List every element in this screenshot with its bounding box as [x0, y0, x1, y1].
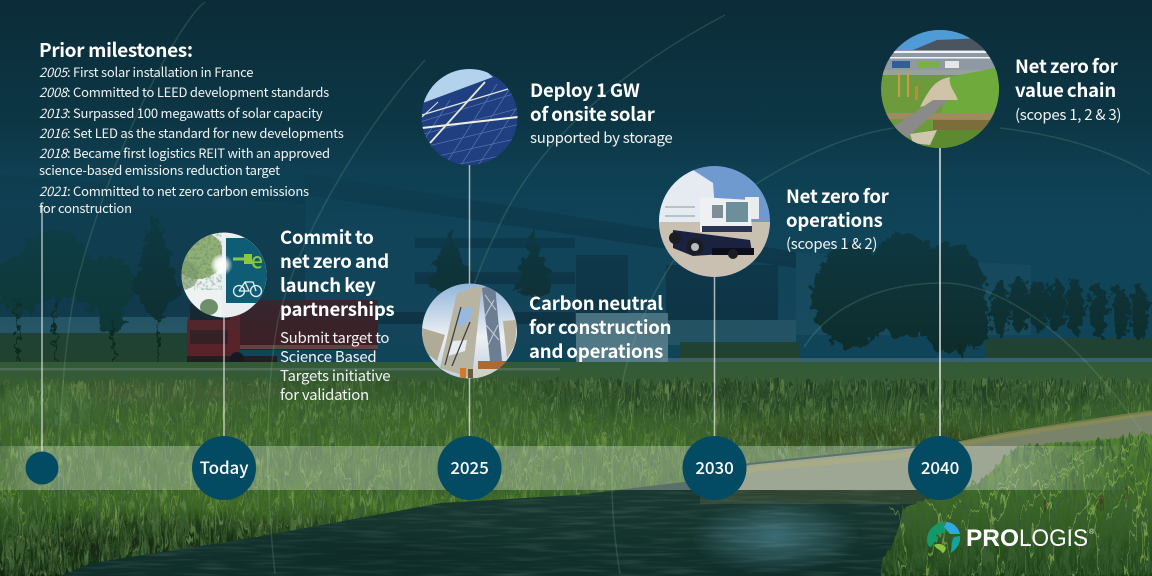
heading: net zero for value chain: value chain	[1015, 77, 1116, 103]
heading: deploy 1 GW: of onsite solar	[530, 101, 656, 127]
photo: solar panels	[422, 69, 518, 165]
heading: net zero for operations	[786, 183, 890, 233]
logo: Prologis: ®	[1089, 528, 1095, 536]
text: submit target: Submit target to	[280, 327, 389, 348]
prior milestones list: 2016: Set LED as the standard for new developments	[39, 123, 344, 142]
building: left warehouse	[0, 175, 305, 345]
prior milestones list: 2008: Committed to LEED development standards	[39, 82, 329, 101]
reeds	[0, 368, 1152, 576]
photo: yard truck at warehouse	[659, 166, 770, 277]
timeline node: 2025	[438, 436, 502, 500]
text: submit target: Science Based	[280, 346, 376, 367]
heading: commit to net zero: launch key	[280, 272, 376, 298]
right reeds underlay	[881, 435, 1152, 576]
timeline node: 2025: 2025	[450, 454, 489, 479]
prior milestones list: 2005: First solar installation in France	[39, 62, 253, 81]
text: submit target	[280, 327, 390, 405]
timeline node: Today	[192, 436, 256, 500]
connector lines	[42, 146, 940, 456]
logo: Prologis	[927, 522, 1095, 553]
heading: net zero for value chain: Net zero for	[1015, 53, 1119, 79]
timeline band	[0, 446, 1130, 490]
building: right warehouse	[796, 252, 1031, 335]
prior milestones list	[39, 62, 344, 217]
heading: carbon neutral: for construction	[529, 314, 671, 340]
logo: wordmark: PRO	[966, 525, 1019, 552]
heading: net zero for operations: Net zero for	[786, 183, 890, 209]
building: centre warehouse	[305, 173, 796, 345]
timeline node: 2030	[682, 436, 746, 500]
prior milestones list: 2021: Committed to net zero carbon emissions	[39, 181, 309, 200]
text: submit target: for validation	[280, 384, 369, 405]
right reeds	[881, 435, 1152, 576]
hazy white truck	[576, 313, 668, 365]
prior milestones list: 2013: Surpassed 100 megawatts of solar capacity	[39, 103, 323, 122]
photo: landscaped path and warehouse	[880, 28, 1000, 150]
text: scopes 1 and 2: (scopes 1 & 2)	[786, 233, 877, 254]
heading: commit to net zero	[280, 224, 395, 322]
heading: carbon neutral: Carbon neutral	[529, 290, 663, 316]
heading: carbon neutral	[529, 290, 671, 364]
photo: concrete tilt-up construction	[420, 282, 520, 382]
prior milestones list: 2018: Became first logistics REIT with an approved	[39, 143, 330, 162]
heading: net zero for value chain	[1015, 53, 1119, 103]
prior milestones heading: Prior milestones:	[39, 36, 193, 63]
timeline node: 2040	[908, 436, 972, 500]
heading: deploy 1 GW	[530, 77, 656, 127]
reeds underlay	[0, 385, 1152, 576]
text: supported by storage: supported by storage	[530, 127, 672, 148]
logo: globe icon	[927, 522, 960, 553]
text: submit target: Targets initiative	[280, 365, 390, 386]
logo: Prologis: LOGIS	[1019, 525, 1088, 552]
heading: commit to net zero: net zero and	[280, 248, 389, 274]
lawn	[0, 362, 1152, 402]
heading: deploy 1 GW: Deploy 1 GW	[530, 77, 640, 103]
water	[60, 405, 1152, 576]
hedges	[0, 333, 1152, 366]
heading: commit to net zero: partnerships	[280, 296, 395, 322]
text: scopes 1, 2 and 3: (scopes 1, 2 & 3)	[1015, 104, 1121, 125]
heading: commit to net zero: Commit to	[280, 224, 374, 250]
prior milestones list: for construction	[39, 198, 132, 217]
heading: carbon neutral: and operations	[529, 338, 663, 364]
red truck	[187, 300, 378, 367]
prior milestones list: science-based emissions reduction target	[39, 160, 280, 179]
timeline node: 2040: 2040	[921, 454, 959, 479]
timeline node: 2030: 2030	[695, 454, 734, 479]
heading: net zero for operations: operations	[786, 207, 883, 233]
photo: EV charging sign with sun: e	[251, 245, 263, 275]
photo: EV charging sign with sun	[182, 232, 266, 318]
trees	[0, 210, 1149, 395]
timeline node: Today: Today	[200, 454, 249, 479]
timeline node: start	[26, 452, 58, 484]
